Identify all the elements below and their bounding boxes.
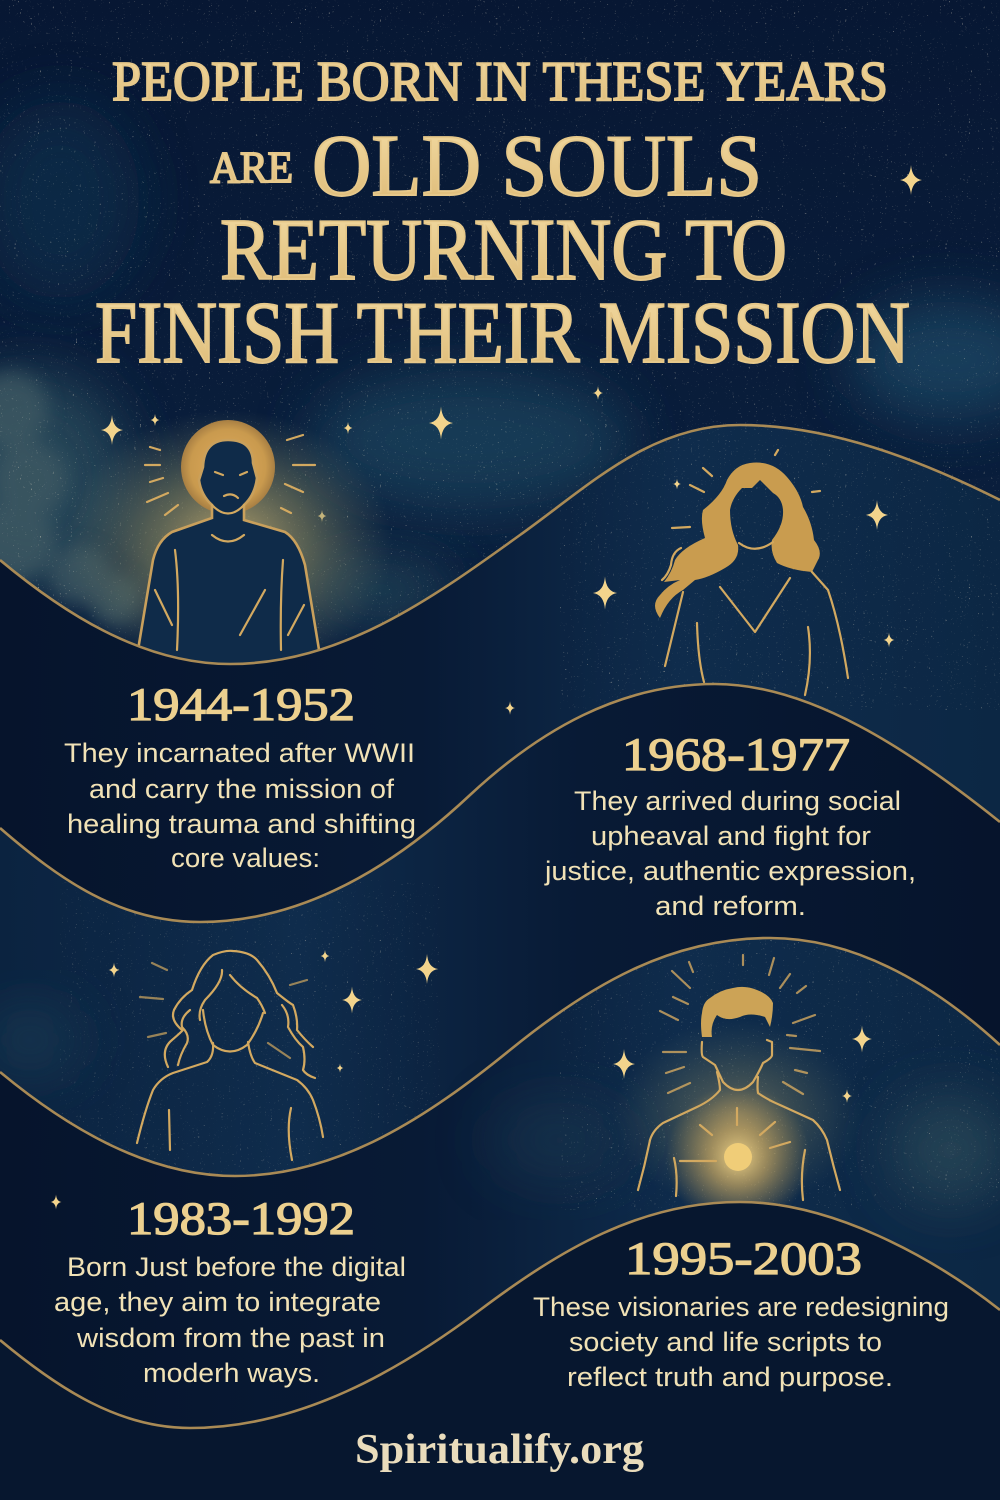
text: 1944-1952 description: They incarnated after WWII (64, 738, 415, 768)
year: 1995-2003: 1995-2003 (625, 1233, 862, 1285)
year: 1983-1992: 1983-1992 (127, 1193, 355, 1245)
text: 1968-1977 description: and reform. (655, 891, 806, 921)
figure: 1968-1977 woman with golden hair (505, 450, 894, 715)
text: 1995-2003 description: reflect truth and purpose. (567, 1362, 893, 1392)
band: 1983-1992 panel (0, 936, 1000, 1427)
footer brand: Spiritualify.org (355, 1427, 644, 1473)
title: RETURNING TO (220, 202, 787, 299)
band: 1944-1952 panel (0, 424, 1000, 921)
text: 1995-2003 description: society and life scripts to (569, 1327, 882, 1357)
text: 1944-1952 description: core values: (171, 843, 320, 873)
text: 1968-1977 description: upheaval and fight for (591, 821, 871, 851)
text: 1983-1992 description: Born Just before the digital (67, 1252, 406, 1282)
title: ARE (210, 143, 293, 192)
figure: 1995-2003 man with glowing heart (613, 955, 872, 1229)
text: 1995-2003 description: These visionaries are redesigning (533, 1292, 949, 1322)
text: 1995-2003 description (533, 1292, 949, 1392)
title (95, 51, 910, 382)
text: 1944-1952 description: healing trauma and shifting (67, 809, 416, 839)
band: 1995-2003 panel (0, 1202, 1000, 1500)
text: 1983-1992 description: age, they aim to integrate (54, 1287, 381, 1317)
title: OLD SOULS (312, 118, 762, 215)
figure: 1983-1992 line-art woman (108, 950, 438, 1160)
figure: 1944-1952 man with halo (63, 410, 393, 680)
text: 1944-1952 description: and carry the mission of (89, 774, 395, 804)
text: 1944-1952 description (64, 738, 416, 873)
text: 1983-1992 description: wisdom from the past in (76, 1323, 385, 1353)
year: 1944-1952: 1944-1952 (127, 679, 355, 731)
title: PEOPLE BORN IN THESE YEARS (112, 51, 888, 113)
text: 1968-1977 description: justice, authentic expression, (544, 856, 916, 886)
text: 1968-1977 description (544, 786, 916, 921)
text: 1983-1992 description: moderh ways. (143, 1358, 320, 1388)
text: 1983-1992 description (54, 1252, 406, 1388)
star: left of 1983-1992 (50, 1194, 62, 1210)
year: 1968-1977: 1968-1977 (622, 729, 850, 781)
sky stars (101, 165, 922, 522)
band: 1968-1977 panel (0, 682, 1000, 1175)
text: 1968-1977 description: They arrived during social (574, 786, 901, 816)
